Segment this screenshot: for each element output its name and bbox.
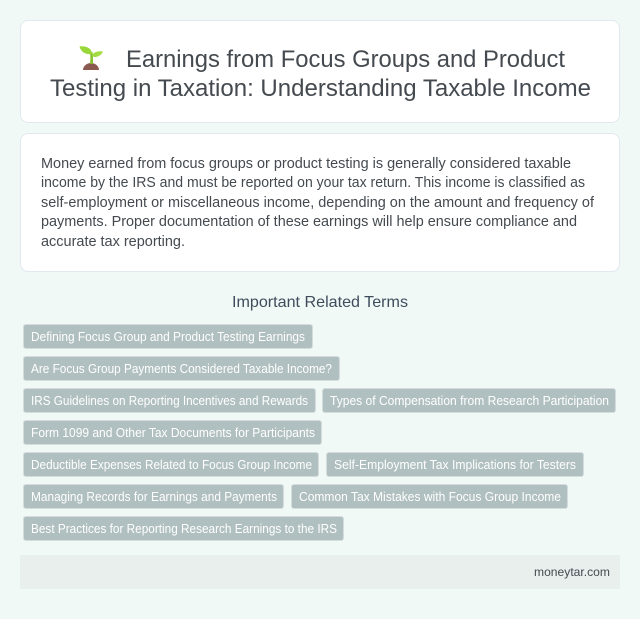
tag labels: Common Tax Mistakes with Focus Group Income (299, 490, 561, 504)
panel: title card (20, 20, 620, 123)
title: Testing in Taxation: Understanding Taxable Income (50, 75, 591, 102)
summary text: self-employment or miscellaneous income, depending on the amount and frequency of (41, 195, 595, 211)
summary text: accurate tax reporting. (41, 234, 185, 250)
tag labels: Self-Employment Tax Implications for Testers (334, 458, 576, 472)
icon: seedling (80, 46, 103, 70)
tag labels: Form 1099 and Other Tax Documents for Participants (31, 426, 315, 440)
footer source: moneytar.com (534, 565, 610, 579)
footer bar (20, 555, 620, 589)
tag labels: Best Practices for Reporting Research Earnings to the IRS (31, 522, 337, 536)
panel: summary card (20, 133, 620, 272)
summary text: payments. Proper documentation of these earnings will help ensure compliance and (41, 214, 577, 230)
tag labels: Types of Compensation from Research Participation (330, 394, 609, 408)
summary text: Money earned from focus groups or product testing is generally considered taxable (41, 156, 571, 172)
tag labels: Defining Focus Group and Product Testing Earnings (31, 330, 305, 344)
title (50, 46, 591, 102)
tag labels: Are Focus Group Payments Considered Taxable Income? (31, 362, 332, 376)
tag labels: IRS Guidelines on Reporting Incentives and Rewards (31, 394, 308, 408)
summary text: income by the IRS and must be reported on your tax return. This income is classified as (41, 175, 585, 191)
heading: important related terms: Important Related Terms (232, 294, 408, 311)
tag labels (31, 330, 609, 536)
tag labels: Managing Records for Earnings and Payments (31, 490, 277, 504)
panel: tag chips (23, 324, 616, 541)
tag labels: Deductible Expenses Related to Focus Group Income (31, 458, 312, 472)
summary text (41, 156, 595, 250)
title: Earnings from Focus Groups and Product (126, 46, 565, 73)
